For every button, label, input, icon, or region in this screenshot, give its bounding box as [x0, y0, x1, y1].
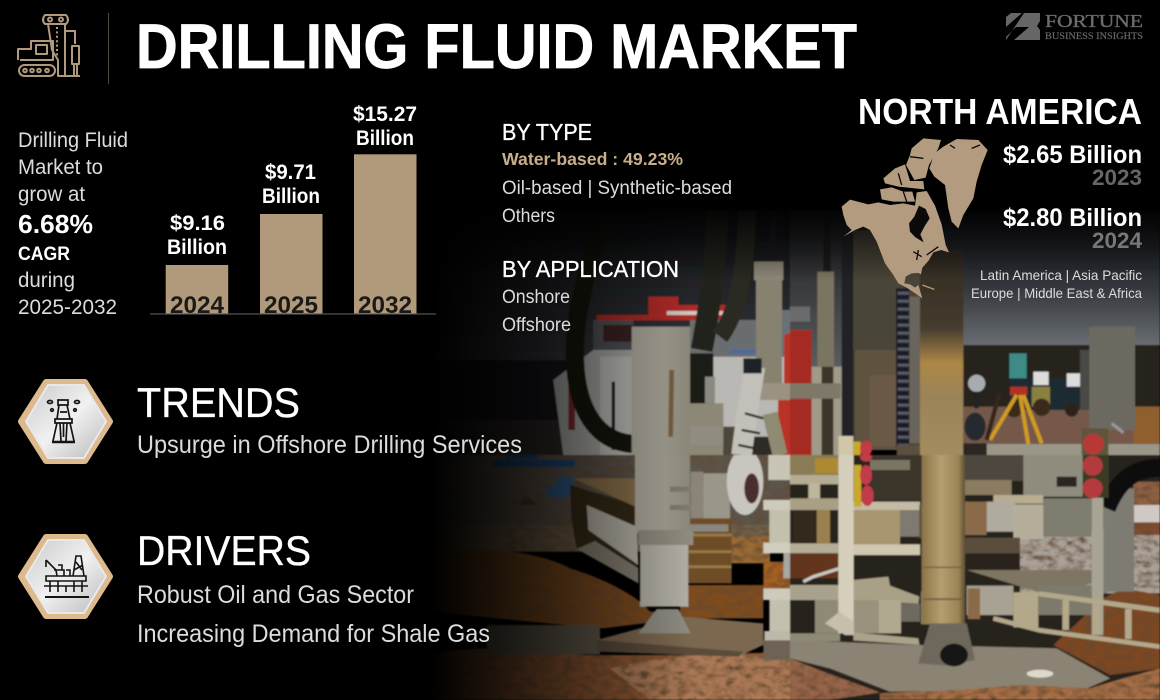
bar 2032: Billion	[356, 127, 414, 150]
bar 2025: Billion	[262, 185, 320, 208]
bar 2024: 2024	[170, 292, 225, 319]
segment: by type: BY TYPE	[502, 119, 592, 145]
bar 2025: 2025	[264, 292, 318, 319]
title: DRILLING FLUID MARKET	[136, 12, 857, 82]
regional stats: 2023	[1092, 165, 1142, 190]
slab	[597, 617, 763, 657]
trends heading and text: TRENDS	[137, 379, 300, 426]
photo quadrant: upper left, hoses and machine housing	[474, 215, 792, 456]
trends heading and text: Upsurge in Offshore Drilling Services	[137, 431, 522, 459]
central pipe	[922, 455, 965, 624]
segment: by application: BY APPLICATION	[502, 256, 679, 282]
photo quadrant: upper right, mast and distant site	[790, 210, 1160, 457]
segment: by type	[502, 119, 732, 227]
right mechanism	[965, 455, 1025, 481]
logo: Fortune Business Insights: BUSINESS INSIGHTS	[1045, 31, 1143, 41]
segment: by application	[502, 256, 679, 336]
bar 2025: $9.71	[265, 161, 316, 184]
regional stats: NORTH AMERICA	[858, 91, 1142, 132]
regional stats: Latin America | Asia Pacific	[980, 267, 1142, 283]
CAGR text block: grow at	[18, 183, 85, 206]
distant equipment	[1010, 378, 1083, 410]
post	[635, 455, 690, 533]
bar 2032: 2032	[358, 292, 412, 319]
bar 2025	[260, 161, 322, 319]
segment: by type: Water-based : 49.23%	[502, 149, 683, 169]
regional stats: $2.80 Billion	[1003, 204, 1142, 232]
header divider	[108, 13, 110, 84]
photo: drilling rig at muddy site	[430, 210, 1160, 700]
CAGR text block: 2025-2032	[18, 296, 117, 319]
photo quadrant: lower right, clamps, bit and puddle	[790, 452, 1160, 700]
CAGR text block: Drilling Fluid	[18, 129, 128, 152]
CAGR text block: 6.68%	[18, 209, 93, 239]
drivers heading and text: Robust Oil and Gas Sector	[137, 581, 414, 609]
segment: by type: Oil-based | Synthetic-based	[502, 178, 732, 199]
logo mark	[1006, 13, 1040, 40]
regional stats: 2024	[1092, 228, 1143, 253]
logo: Fortune Business Insights: FORTUNE	[1045, 11, 1143, 31]
coiled hose and clamp base	[727, 448, 763, 515]
header icon: crawler drilling rig	[18, 15, 80, 76]
regional stats: $2.65 Billion	[1003, 141, 1142, 169]
drivers heading and text: DRIVERS	[137, 527, 311, 574]
drill bit	[918, 623, 975, 666]
segment: by type: Others	[502, 206, 555, 227]
drivers heading and text: Increasing Demand for Shale Gas	[137, 620, 490, 648]
regional stats: Europe | Middle East & Africa	[971, 285, 1142, 301]
bar 2024: $9.16	[170, 212, 225, 235]
segment: by application: Onshore	[502, 287, 570, 308]
CAGR text block: Market to	[18, 156, 103, 179]
central clamps	[870, 455, 922, 500]
trends heading and text	[137, 379, 522, 459]
icon: trends hexagon with oil derrick	[21, 382, 110, 461]
bar 2024: Billion	[167, 236, 227, 259]
ladder	[993, 594, 1160, 647]
regional stats	[858, 91, 1143, 301]
CAGR text block: during	[18, 269, 75, 292]
map: North America	[842, 138, 988, 298]
icon: drivers hexagon with offshore platform	[21, 537, 110, 616]
photo quadrant: lower left, track and soil	[430, 448, 800, 700]
bar 2032: $15.27	[353, 103, 417, 126]
bar 2032	[353, 103, 417, 319]
bar 2024	[166, 212, 228, 319]
logo: Fortune Business Insights	[1006, 11, 1143, 41]
segment: by application: Offshore	[502, 315, 571, 336]
CAGR text block: CAGR	[18, 244, 70, 265]
drivers heading and text	[137, 527, 490, 648]
track	[570, 485, 639, 568]
axis line	[150, 313, 436, 315]
left clamps	[790, 455, 838, 475]
puddle	[790, 640, 1110, 692]
CAGR text block	[18, 129, 128, 319]
bar chart: market size	[150, 103, 436, 319]
